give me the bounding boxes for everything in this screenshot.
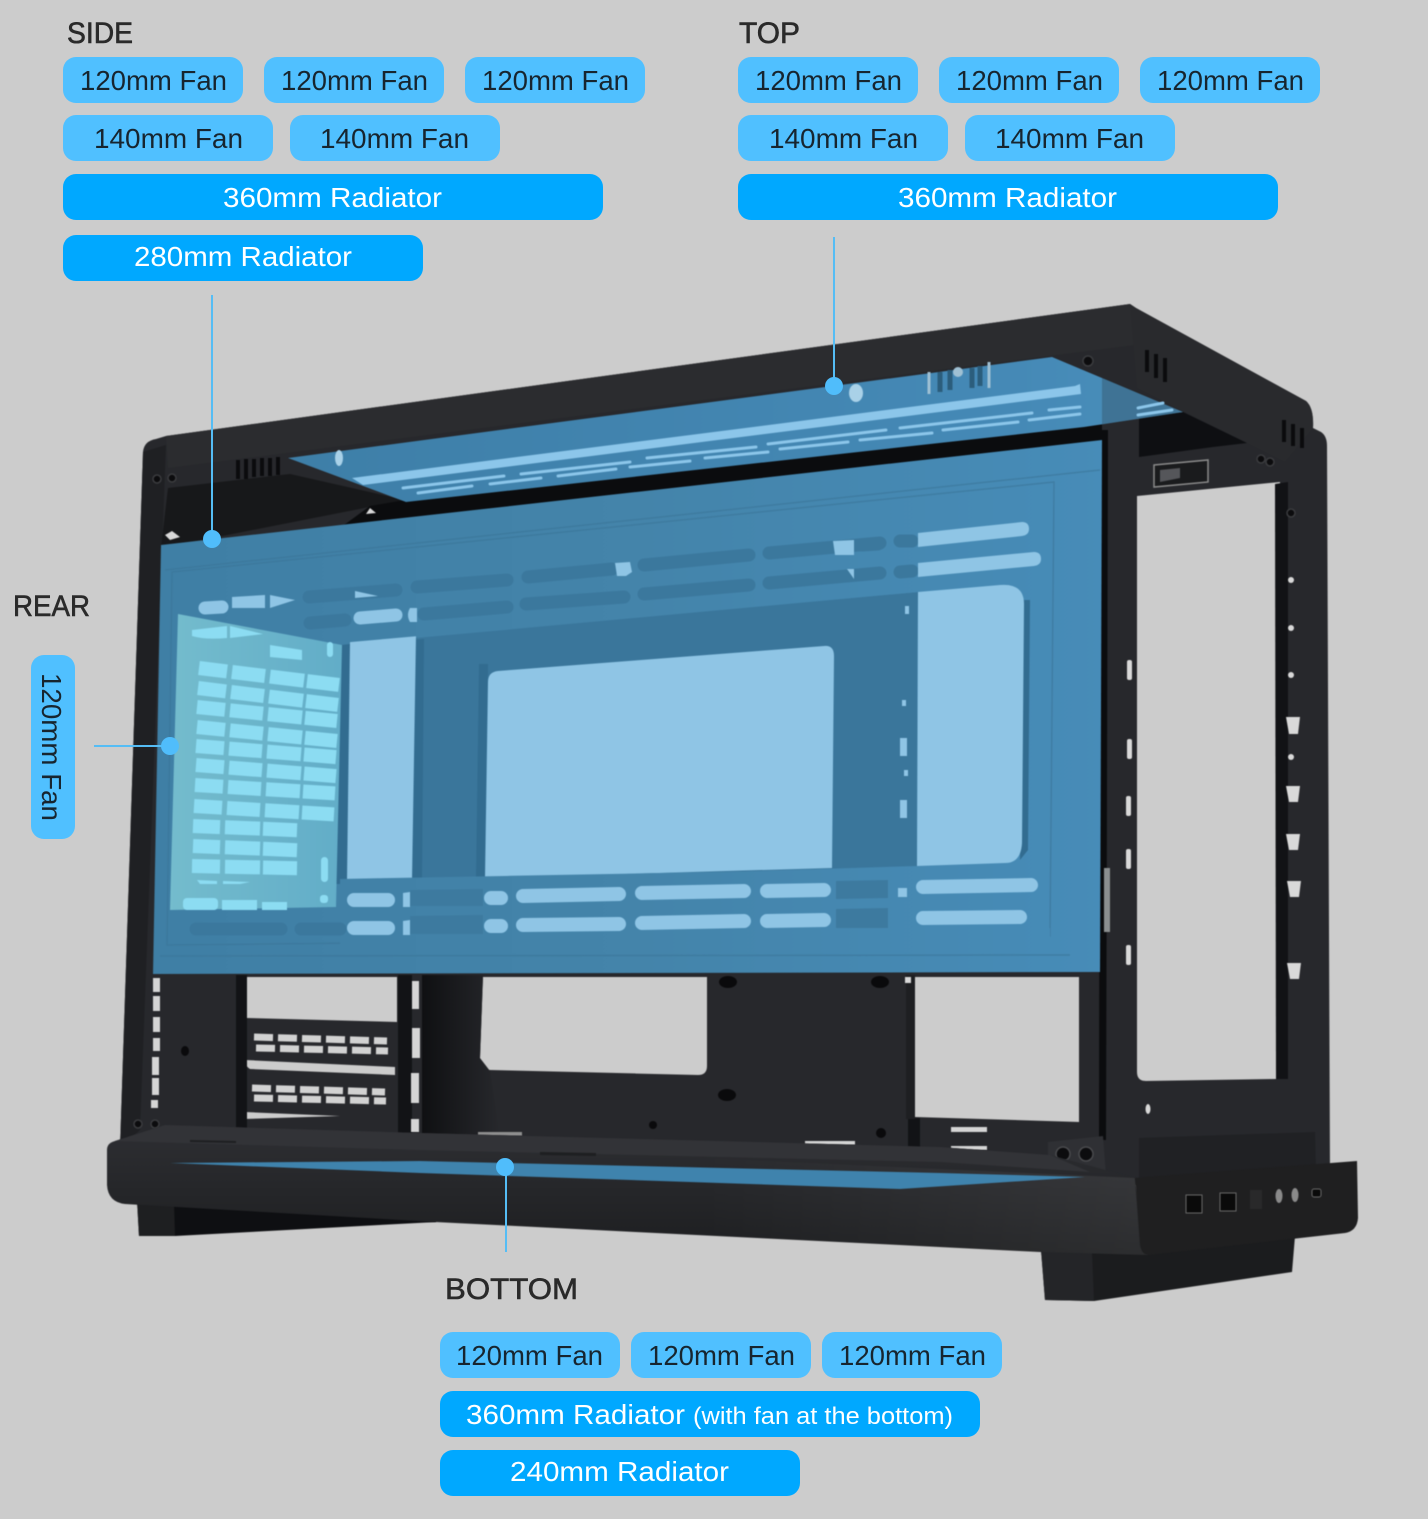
band across lower slots	[340, 866, 1050, 945]
right top rail	[1130, 304, 1313, 462]
rear of right pillar	[1275, 482, 1288, 1079]
base tray	[107, 1125, 1148, 1255]
chip: 120mm fan: 120mm Fan	[281, 65, 428, 96]
bottom blue mounting area	[170, 1161, 1085, 1189]
front right screw plate	[1048, 1136, 1106, 1175]
chip: 140mm fan	[738, 115, 948, 161]
callout: bottom	[496, 1158, 514, 1252]
window shadow strips	[332, 600, 1030, 884]
left foot	[137, 1200, 436, 1236]
foot main	[1041, 1236, 1295, 1301]
top rail highlight	[166, 304, 1135, 468]
long top vent band	[352, 384, 1081, 485]
callout: rear	[94, 737, 179, 755]
panel: bottom options	[440, 1273, 1002, 1496]
leader line	[505, 1167, 507, 1252]
light slots upper left	[205, 607, 396, 618]
inner shadow at upper right	[1139, 412, 1247, 457]
marker dot	[496, 1158, 514, 1176]
chassis body with open windows	[120, 304, 1330, 1185]
side slits below panel	[151, 978, 987, 1150]
panel: side options	[63, 17, 645, 281]
light slots upper right	[918, 522, 1041, 577]
chip: 120mm fan: 120mm Fan	[755, 65, 902, 96]
panel: rear options	[13, 590, 90, 839]
panel tip over pillar	[1102, 378, 1183, 424]
chip: 120mm fan: 120mm Fan	[839, 1340, 986, 1371]
recess outline	[167, 482, 1054, 945]
strip between plate and window	[906, 975, 915, 1119]
top vent bracket	[929, 362, 989, 394]
chip: 140mm fan: 140mm Fan	[769, 123, 918, 154]
chip: 140mm fan: 140mm Fan	[320, 123, 469, 154]
rear sheet	[170, 614, 342, 910]
chip: 120mm fan vertical: 120mm Fan	[36, 673, 67, 821]
chip: 120mm fan vertical	[31, 655, 75, 839]
chip: 120mm fan	[738, 57, 918, 103]
chip: 120mm fan	[264, 57, 444, 103]
side sheet	[153, 440, 1102, 974]
dark stripes below panel	[236, 975, 920, 1150]
icon: front screws	[1056, 1147, 1093, 1161]
front I/O panel	[1135, 1161, 1358, 1255]
chip: 120mm fan: 120mm Fan	[648, 1340, 795, 1371]
tray top face	[115, 1125, 1090, 1172]
chip: 120mm fan: 120mm Fan	[482, 65, 629, 96]
chip: 140mm fan: 140mm Fan	[995, 123, 1144, 154]
chip: 360mm radiator	[738, 174, 1278, 220]
chip: 140mm fan	[63, 115, 273, 161]
chip: 140mm fan	[290, 115, 500, 161]
top vent brackets	[238, 350, 1302, 479]
chip: 120mm fan	[631, 1332, 811, 1378]
chip: 120mm fan	[465, 57, 645, 103]
chip: 360mm radiator: 360mm Radiator	[898, 182, 1117, 213]
bracket frame	[1154, 460, 1208, 487]
chip: 140mm fan	[965, 115, 1175, 161]
silver strip	[1104, 868, 1110, 932]
chip: 120mm fan	[822, 1332, 1002, 1378]
bracket near right window	[1154, 460, 1208, 487]
marker dot	[825, 377, 843, 395]
chip: 360mm radiator with note: 360mm Radiator	[466, 1399, 685, 1430]
leader line	[833, 237, 835, 386]
left window	[347, 635, 416, 882]
chip: 140mm fan: 140mm Fan	[94, 123, 243, 154]
heading: bottom: BOTTOM	[445, 1273, 578, 1306]
rear panel top and bottom slots	[183, 626, 333, 910]
side mounting panel	[153, 440, 1102, 974]
chip: 120mm fan	[440, 1332, 620, 1378]
bracket outline	[929, 362, 989, 394]
upper crease	[165, 470, 1100, 570]
dark slots	[196, 541, 912, 929]
heading: rear: REAR	[13, 590, 90, 623]
marker dot	[203, 530, 221, 548]
large center window	[485, 646, 834, 878]
marker dot	[161, 737, 179, 755]
USB ports	[1186, 1189, 1321, 1213]
left of middle window shadow	[422, 975, 500, 1135]
lower crease	[160, 955, 1070, 956]
chip: 360mm radiator	[63, 174, 603, 220]
dark recess behind lower slots	[410, 880, 888, 934]
leader line	[211, 295, 213, 538]
right window	[917, 585, 1024, 866]
lower right plate	[1139, 1132, 1316, 1180]
grey tab	[478, 1132, 522, 1136]
foot corner	[137, 1200, 175, 1236]
front right upright	[1099, 430, 1108, 1140]
small notches	[403, 540, 909, 935]
audio jacks	[1276, 1188, 1298, 1203]
heading: top: TOP	[739, 17, 800, 50]
chassis: PC case frame	[120, 304, 1330, 1185]
left upright	[120, 445, 166, 1148]
light wedges upper left	[232, 591, 417, 622]
tray dark recess	[190, 1140, 596, 1156]
leader line	[94, 745, 170, 747]
top sheet	[288, 357, 1183, 502]
chip: 360mm radiator with note	[440, 1391, 980, 1437]
rear mounting panel	[170, 614, 342, 910]
foot wedge	[137, 1200, 436, 1236]
tray front	[107, 1125, 1148, 1255]
interior black gap	[340, 424, 1102, 528]
light slots lower	[354, 885, 1031, 928]
oval holes	[335, 384, 863, 466]
top mounting panel	[288, 357, 1183, 502]
PCI slot vents	[252, 1037, 388, 1101]
panel: top options	[738, 17, 1320, 220]
thin top vents	[403, 403, 1172, 493]
callout: side	[203, 295, 221, 548]
chip: 120mm fan	[1140, 57, 1320, 103]
chip: 280mm radiator	[63, 235, 423, 281]
interior shadow under top rail	[161, 474, 405, 548]
chip: 240mm radiator	[440, 1450, 800, 1496]
chip: 120mm fan: 120mm Fan	[956, 65, 1103, 96]
power button	[1250, 1190, 1262, 1209]
recessed inner plate	[340, 592, 918, 884]
heading: side: SIDE	[67, 17, 133, 50]
band across upper slots	[340, 586, 918, 643]
icon: screw holes	[134, 356, 1295, 1128]
callout: top	[825, 237, 843, 395]
icon: mounting keyholes	[181, 976, 889, 1138]
bracket dot	[953, 367, 963, 377]
chip: 360mm radiator: 360mm Radiator	[223, 182, 442, 213]
chip: 120mm fan: 120mm Fan	[1157, 65, 1304, 96]
chip: 360mm radiator with note: (with fan at the bottom)	[693, 1403, 953, 1430]
chip: 120mm fan: 120mm Fan	[80, 65, 227, 96]
panel plate	[1135, 1161, 1358, 1255]
rear fan vent cells	[192, 668, 339, 868]
chip: 120mm fan	[939, 57, 1119, 103]
bracket inner bars	[940, 366, 980, 392]
chip: 120mm fan: 120mm Fan	[456, 1340, 603, 1371]
foot corner	[1041, 1250, 1094, 1301]
chip: 280mm radiator: 280mm Radiator	[134, 241, 352, 272]
bracket detail	[1160, 468, 1180, 482]
chip: 240mm radiator: 240mm Radiator	[510, 1456, 729, 1487]
tray right sheen	[700, 1158, 1148, 1255]
chip: 120mm fan	[63, 57, 243, 103]
right foot	[1041, 1236, 1295, 1301]
icon: right pillar holes	[165, 508, 1301, 1114]
